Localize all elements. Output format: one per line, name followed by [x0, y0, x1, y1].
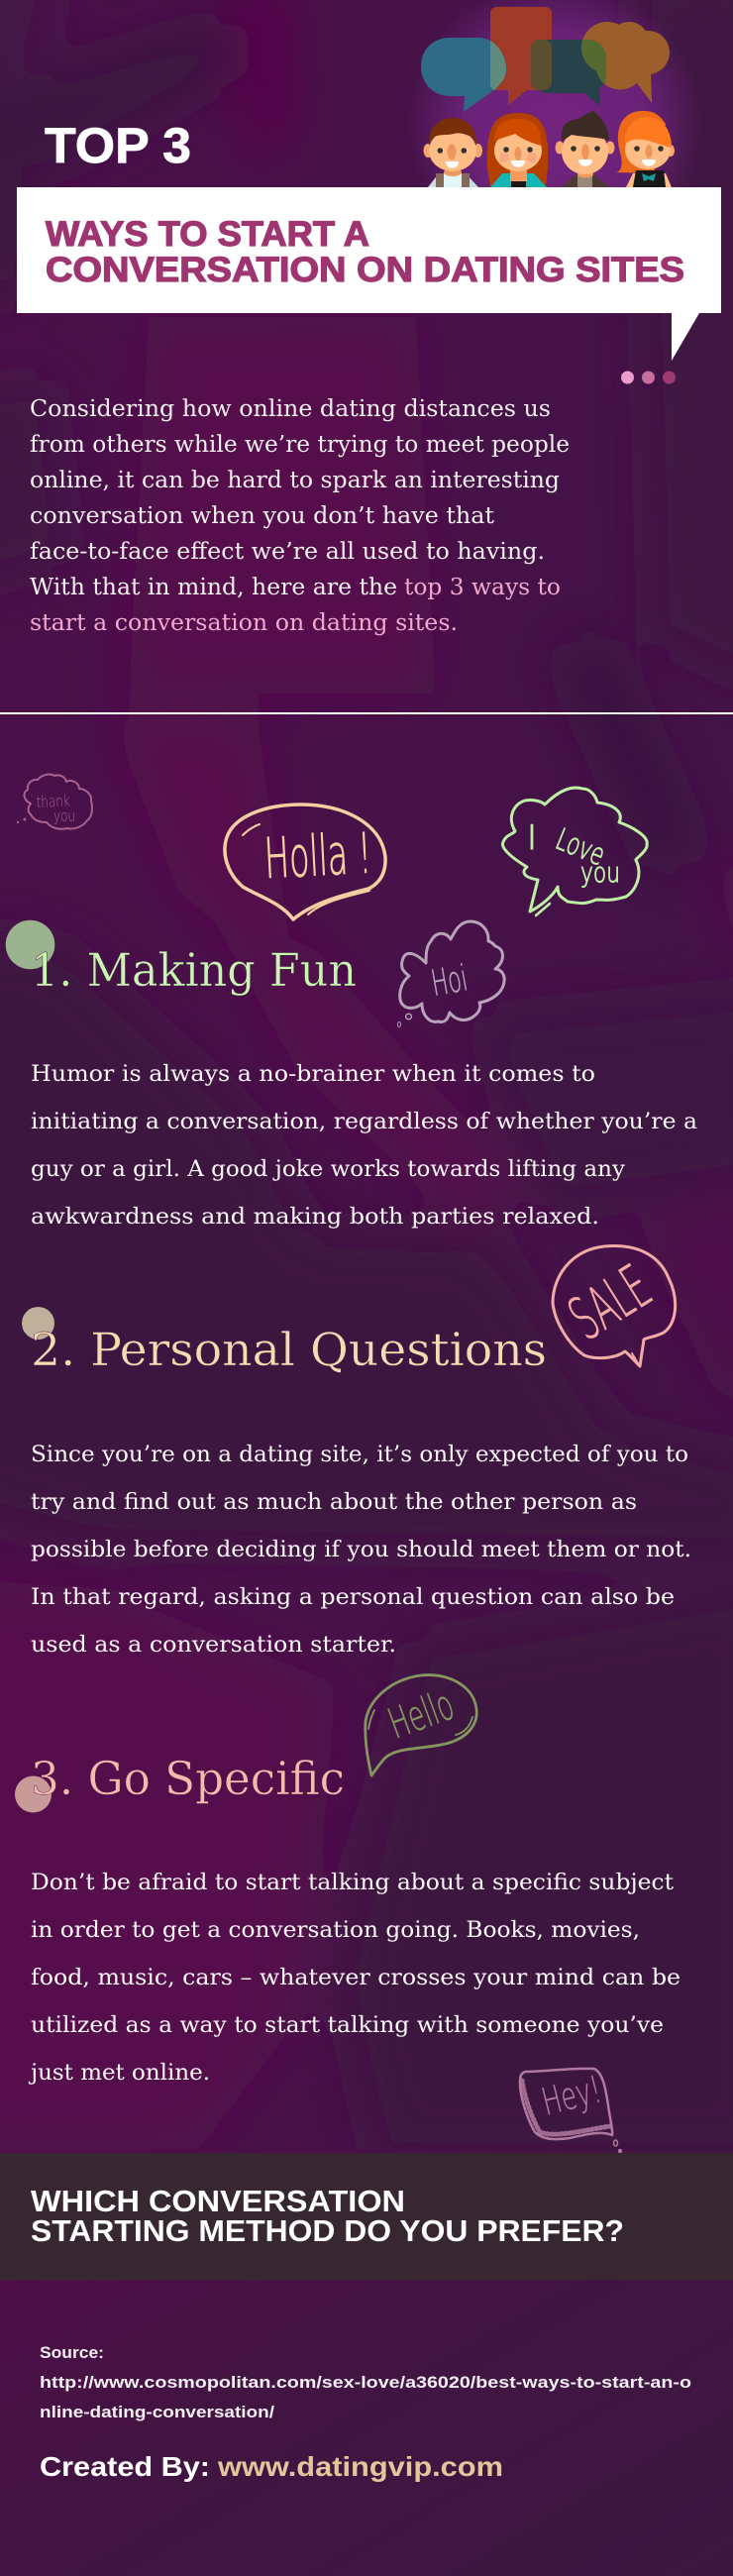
intro paragraph: conversation when you don’t have that — [30, 503, 495, 529]
blue bubble — [421, 38, 506, 112]
question text: STARTING METHOD DO YOU PREFER? — [31, 2213, 624, 2248]
intro paragraph: Considering how online dating distances us — [30, 396, 551, 422]
doodle: sale — [553, 1245, 676, 1366]
step 1 body text: Humor is always a no-brainer when it comes to — [31, 1062, 595, 1087]
intro paragraph: face-to-face effect we’re all used to having. — [30, 539, 545, 565]
credit line — [40, 2451, 503, 2482]
step 3 body text: Don’t be afraid to start talking about a specific subject — [31, 1871, 674, 1895]
step 1 — [6, 920, 357, 997]
step 2 body text: Since you’re on a dating site, it’s only expected of you to — [31, 1443, 688, 1467]
doodle: thank you: you — [53, 806, 75, 825]
three dots — [621, 371, 676, 384]
intro paragraph: start a conversation on dating sites. — [30, 610, 458, 636]
step 3 body text — [29, 1871, 681, 2086]
source text: http://www.cosmopolitan.com/sex-love/a36020/best-ways-to-start-an-o — [40, 2373, 691, 2392]
question text — [31, 2184, 624, 2248]
step 1 body text: initiating a conversation, regardless of whether you’re a — [31, 1110, 697, 1134]
doodle: I love you: I — [527, 818, 537, 858]
title text — [46, 215, 684, 289]
intro paragraph: top 3 ways to — [404, 575, 561, 600]
icon: speech bubbles over characters — [421, 7, 670, 112]
doodle: I love you — [502, 788, 647, 915]
step 1 body text: guy or a girl. A good joke works towards lifting any — [31, 1157, 626, 1182]
title speech box — [17, 187, 721, 361]
icon: character boy with brown hair — [424, 118, 482, 187]
doodle: hoi — [398, 921, 504, 1026]
source text: Source: — [40, 2343, 104, 2362]
step 3 bullet circle — [15, 1775, 52, 1813]
step 3 body text: just met online. — [29, 2061, 210, 2086]
doodle: sale: SALE — [558, 1252, 663, 1354]
red bubble — [490, 7, 552, 105]
icon: character girl with orange hair — [616, 111, 675, 187]
doodle: hello — [366, 1675, 476, 1775]
icon: character girl with red long hair — [487, 113, 548, 187]
doodle: hoi: Hoi — [428, 958, 471, 1005]
step 2 body text: used as a conversation starter. — [31, 1633, 396, 1658]
intro paragraph: online, it can be hard to spark an interesting — [30, 468, 560, 493]
step 1 bullet circle — [6, 920, 54, 969]
step 2 — [22, 1307, 547, 1376]
doodle: I love you: you — [580, 856, 620, 889]
credit line: www.datingvip.com — [217, 2451, 503, 2482]
question text: WHICH CONVERSATION — [31, 2184, 405, 2218]
credit line: Created By: — [40, 2451, 210, 2482]
source text: nline-dating-conversation/ — [40, 2403, 274, 2421]
doodle: holla — [225, 805, 385, 919]
step 3 — [15, 1752, 345, 1813]
step 2 heading: 2. Personal Questions — [31, 1323, 547, 1376]
heading: top 3: TOP 3 — [45, 118, 191, 173]
intro paragraph: from others while we’re trying to meet people — [30, 432, 570, 458]
step 2 bullet circle — [22, 1307, 54, 1340]
title text: CONVERSATION ON DATING SITES — [46, 251, 684, 289]
source text — [40, 2343, 691, 2421]
step 3 heading: 3. Go Specific — [31, 1752, 345, 1805]
doodle: hello: Hello — [382, 1680, 460, 1748]
doodle: thank you: thank — [36, 791, 70, 811]
doodle: hey — [520, 2068, 622, 2153]
title text: WAYS TO START A — [46, 215, 369, 254]
intro paragraph — [30, 396, 570, 636]
purple glow behind characters — [416, 0, 694, 187]
step 2 body text — [31, 1443, 691, 1658]
intro paragraph: With that in mind, here are the — [30, 575, 397, 600]
question band — [0, 2153, 733, 2280]
step 2 body text: try and find out as much about the other person as — [31, 1490, 637, 1515]
doodle: I love you: Love — [551, 822, 609, 873]
step 1 body text: awkwardness and making both parties relaxed. — [31, 1205, 599, 1230]
step 3 body text: utilized as a way to start talking with someone you’ve — [31, 2013, 664, 2038]
doodle: holla: Holla ! — [262, 821, 373, 892]
step 1 heading: 1. Making Fun — [31, 943, 357, 997]
dark green bubble — [531, 40, 606, 106]
step 1 body text — [31, 1062, 697, 1230]
step 2 body text: possible before deciding if you should meet them or not. — [31, 1538, 691, 1562]
step 2 body text: In that regard, asking a personal question can also be — [31, 1585, 675, 1610]
doodle: thank you — [17, 775, 92, 829]
icon: character boy with dark hair — [555, 111, 614, 187]
brown cloud bubble — [581, 22, 670, 103]
doodle: hey: Hey! — [538, 2068, 605, 2124]
step 3 body text: food, music, cars – whatever crosses your mind can be — [31, 1966, 681, 1990]
step 3 body text: in order to get a conversation going. Books, movies, — [31, 1918, 640, 1943]
